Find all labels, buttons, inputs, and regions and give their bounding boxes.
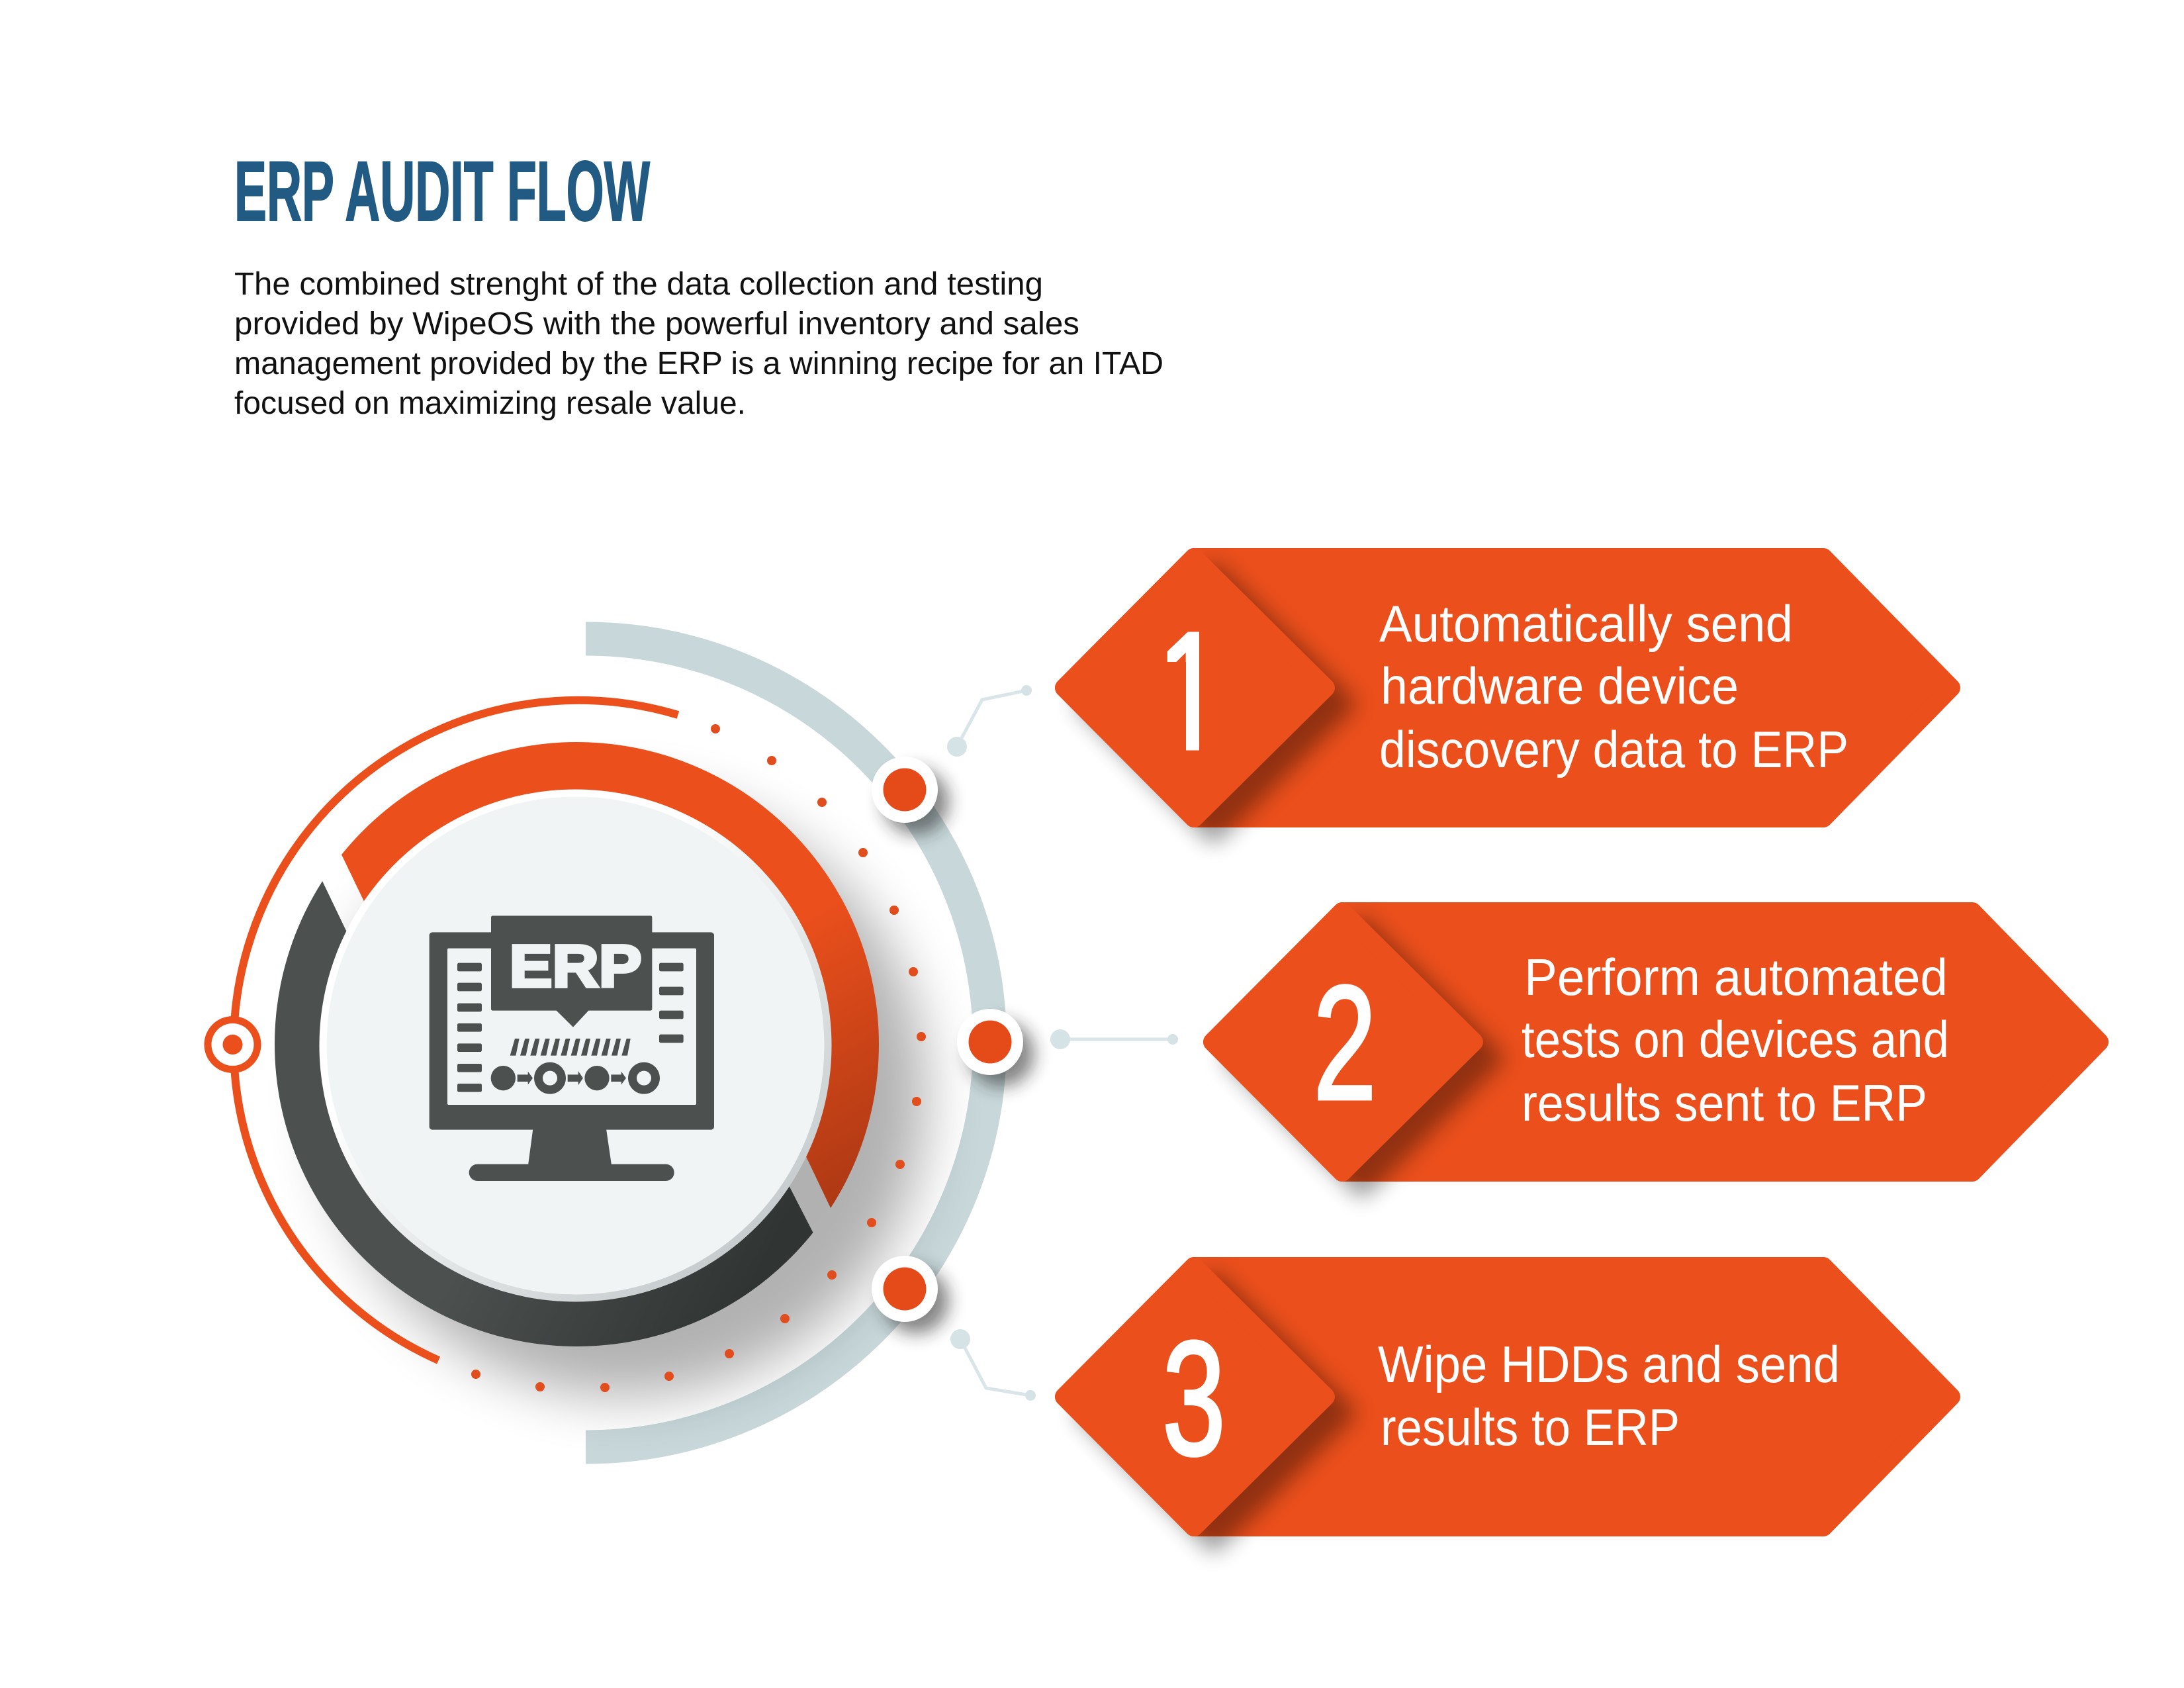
step 2 diamond shadow [1232,927,1494,1188]
dark ring segment [275,881,813,1346]
step 1 text [1379,594,1848,778]
step 3 text: results to ERP [1381,1398,1680,1456]
step 3 diamond shadow [1084,1282,1345,1543]
intro text block: focused on maximizing resale value. [234,386,746,421]
node 3 [872,1256,949,1334]
step 1 text: hardware device [1381,657,1739,715]
panel: step 3 [1064,1266,1951,1543]
thin orange arc [234,700,678,1360]
step 1 ribbon [1064,557,1951,818]
connector 1 [947,685,1032,757]
central disc [319,789,831,1301]
node 2 [957,1009,1034,1087]
step 1 diamond shadow [1084,573,1345,834]
panel: step 1 [1064,557,1951,834]
connector 2 [1050,1029,1178,1049]
step 2 number: 2 [1313,953,1377,1133]
step 2 text [1522,948,1949,1132]
step 3 number: 3 [1162,1308,1226,1489]
outer light grey arc [586,639,990,1447]
step 2 text: Perform automated [1524,948,1948,1006]
intro text block: provided by WipeOS with the powerful inventory and sales [234,306,1079,342]
soft drop shadow of hub [324,794,927,1397]
dotted orange orbit [471,724,926,1392]
intro text block: The combined strenght of the data collection and testing [234,267,1043,302]
left target marker [204,1016,261,1073]
step 2 ribbon [1212,912,2099,1172]
step 2 text: results sent to ERP [1522,1074,1927,1132]
step 3 text [1378,1335,1840,1456]
step 3 diamond [1064,1266,1326,1527]
icon: ERP monitor: ERP [510,933,642,1000]
step 1 text: Automatically send [1379,594,1793,653]
step 2 text: tests on devices and [1522,1010,1949,1068]
step 1 number: 1 [1158,599,1224,784]
title: ERP AUDIT FLOW [234,144,650,239]
icon: ERP monitor [430,915,714,1181]
step 3 ribbon [1064,1266,1951,1527]
panel: step 2 [1212,912,2099,1188]
node 1 [872,757,949,835]
intro text block: management provided by the ERP is a winning recipe for an ITAD [234,346,1163,381]
connector 3 [950,1329,1036,1401]
step 1 text: discovery data to ERP [1379,720,1848,778]
intro text block [234,267,1163,421]
panel: circular ERP diagram [204,639,1034,1447]
orange ring segment [341,742,879,1208]
step 1 diamond [1064,557,1326,818]
step 2 diamond [1212,912,1474,1172]
step 3 text: Wipe HDDs and send [1378,1335,1840,1393]
